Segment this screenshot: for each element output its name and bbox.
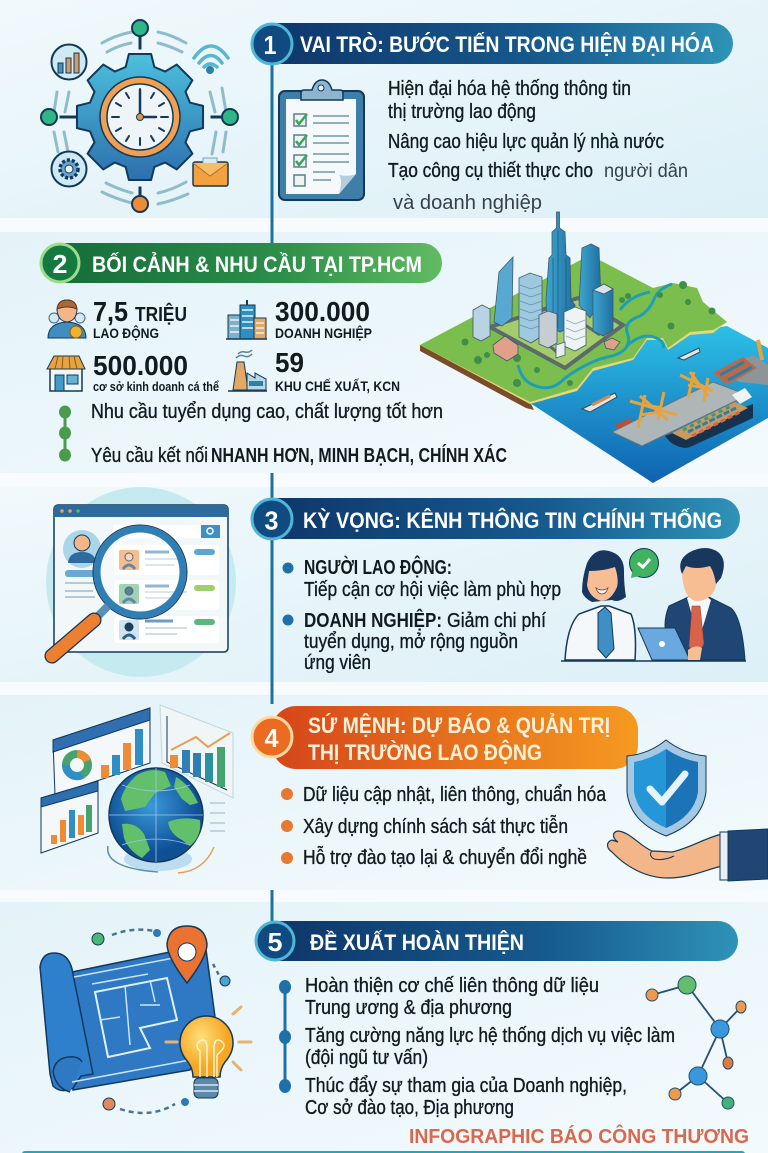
panel background: section 4	[0, 695, 768, 890]
illustration: dashboards and globe	[41, 705, 233, 873]
bullet list: demand	[59, 401, 507, 467]
heading 3	[252, 498, 740, 539]
icon: clipboard checklist	[279, 80, 364, 200]
bullet list: proposals: Cơ sở đào tạo, Địa phương	[305, 1097, 514, 1119]
text block: beneficiaries: ứng viên	[304, 652, 371, 674]
stat: industrial zones: 59	[275, 347, 304, 378]
watermark credit: INFOGRAPHIC BÁO CÔNG THƯƠNG	[409, 1124, 749, 1148]
bullet list: mission: Dữ liệu cập nhật, liên thông, chuẩn hóa	[303, 784, 607, 806]
bullet list: mission	[281, 784, 607, 869]
heading 1	[252, 23, 733, 64]
text block: role points: thị trường lao động	[388, 101, 536, 123]
heading 4: THỊ TRƯỜNG LAO ĐỘNG	[308, 740, 542, 765]
road grid	[490, 298, 623, 368]
bottom bar	[22, 1151, 745, 1153]
bullet list: proposals: (đội ngũ tư vấn)	[305, 1047, 428, 1069]
stat: household businesses	[47, 350, 219, 394]
icon: office buildings	[226, 300, 267, 339]
timeline connector	[270, 60, 274, 924]
heading 4	[252, 706, 638, 769]
heading 5: ĐỀ XUẤT HOÀN THIỆN	[310, 930, 524, 955]
text block: role points: và doanh nghiệp	[393, 192, 542, 214]
stat: workers: TRIỆU	[135, 302, 187, 326]
port quay	[582, 340, 768, 448]
bullet list: proposals: Hoàn thiện cơ chế liên thông dữ liệu	[305, 975, 599, 997]
bullet list: demand: Nhu cầu tuyển dụng cao, chất lượng tốt hơn	[91, 401, 443, 423]
stat: enterprises	[226, 296, 372, 341]
text block: beneficiaries: NGƯỜI LAO ĐỘNG:	[304, 555, 452, 579]
icon: shield on hand	[608, 740, 768, 881]
heading 2: 2	[52, 249, 68, 279]
stat: workers	[48, 296, 187, 341]
heading 1: 1	[264, 30, 276, 60]
stat: enterprises: 300.000	[275, 296, 370, 327]
illustration: worker and employer	[561, 548, 746, 661]
stat: industrial zones: KHU CHẾ XUẤT, KCN	[275, 378, 400, 394]
bullet list: proposals: Tăng cường năng lực hệ thống dịch vụ việc làm	[305, 1025, 675, 1047]
heading 2: BỐI CẢNH & NHU CẦU TẠI TP.HCM	[92, 251, 422, 277]
heading 2	[41, 243, 442, 283]
heading 3: 3	[264, 506, 278, 536]
illustration: blueprint, pin and bulb	[40, 926, 251, 1113]
panel background: section 3	[0, 487, 768, 682]
illustration: job search browser	[46, 487, 236, 677]
bullet list: demand: NHANH HƠN, MINH BẠCH, CHÍNH XÁC	[211, 444, 507, 467]
icon: shop	[47, 356, 85, 391]
text block: role points: Nâng cao hiệu lực quản lý nhà nước	[388, 131, 664, 153]
bullet list: proposals	[279, 975, 675, 1119]
panel background: section 2	[0, 232, 768, 473]
heading 1: VAI TRÒ: BƯỚC TIẾN TRONG HIỆN ĐẠI HÓA	[300, 32, 714, 57]
panel: section 2	[41, 212, 768, 483]
heading 3: KỲ VỌNG: KÊNH THÔNG TIN CHÍNH THỐNG	[303, 507, 722, 533]
panel background: section 5	[0, 902, 768, 1153]
text block: role points	[388, 78, 688, 214]
text block: role points: Tạo công cụ thiết thực cho	[388, 160, 593, 182]
panel background: section 1	[0, 0, 768, 218]
panel: section 3	[46, 487, 746, 677]
trees	[462, 281, 716, 387]
text block: beneficiaries	[282, 555, 561, 674]
panel: section 5	[22, 921, 749, 1153]
heading 4: SỨ MỆNH: DỰ BÁO & QUẢN TRỊ	[308, 713, 610, 738]
icon: gear and clock hub	[41, 20, 238, 212]
stat: enterprises: DOANH NGHIỆP	[275, 324, 372, 341]
stat: workers: LAO ĐỘNG	[93, 324, 159, 341]
river	[518, 284, 672, 388]
text block: beneficiaries: tuyển dụng, mở rộng nguồn	[304, 631, 518, 653]
skyscrapers	[473, 212, 620, 361]
icon: network graph	[646, 976, 746, 1109]
panel: section 4	[41, 705, 768, 881]
stat: workers: 7,5	[93, 296, 128, 327]
bullet list: mission: Xây dựng chính sách sát thực tiễn	[303, 815, 568, 838]
heading 5	[256, 921, 738, 961]
stat: industrial zones	[228, 347, 400, 394]
stat: household businesses: cơ sở kinh doanh cá thể	[93, 379, 219, 394]
icon: worker	[48, 300, 86, 338]
bullet list: demand: Yêu cầu kết nối	[91, 445, 208, 467]
bullet list: mission: Hỗ trợ đào tạo lại & chuyển đổi nghề	[303, 846, 587, 869]
heading 5: 5	[268, 927, 282, 957]
stat: household businesses: 500.000	[93, 350, 188, 381]
text block: role points: người dân	[604, 161, 688, 182]
panel: section 1	[41, 20, 733, 214]
heading 4: 4	[264, 723, 279, 753]
text block: beneficiaries: Giảm chi phí	[447, 610, 546, 632]
bullet list: proposals: Trung ương & địa phương	[305, 997, 512, 1019]
icon: factory	[228, 350, 267, 391]
text block: beneficiaries: Tiếp cận cơ hội việc làm phù hợp	[304, 579, 561, 601]
illustration: isometric city and port	[420, 212, 768, 483]
text block: beneficiaries: DOANH NGHIỆP:	[304, 608, 442, 632]
bullet list: proposals: Thúc đẩy sự tham gia của Doanh nghiệp,	[305, 1075, 627, 1097]
text block: role points: Hiện đại hóa hệ thống thông tin	[388, 78, 631, 100]
